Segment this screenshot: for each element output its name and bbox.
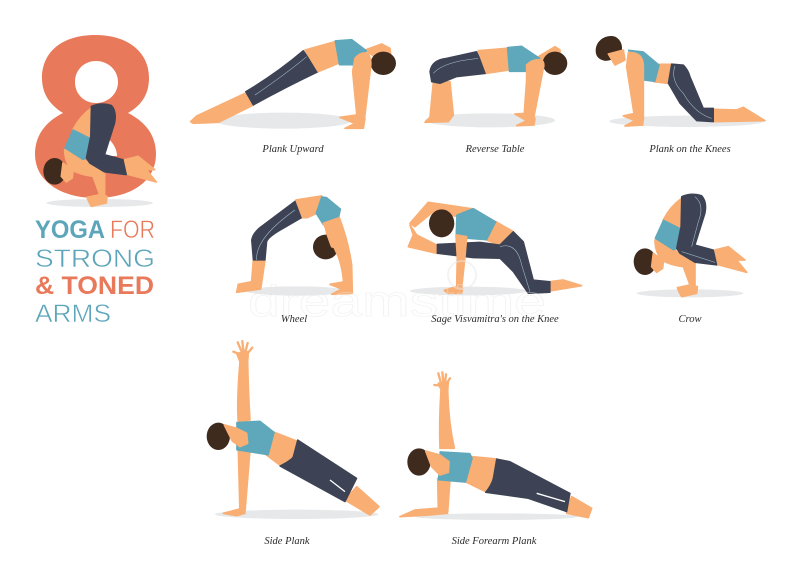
pose name: Sage Visvamitra's on the Knee [431, 314, 559, 325]
pose: sage visvamitra on the knee [408, 202, 582, 295]
pose name: Crow [679, 314, 701, 325]
hand [87, 195, 107, 206]
hair [313, 235, 338, 259]
big number 8 [35, 35, 156, 198]
pose name: Reverse Table [465, 144, 525, 155]
raised arm [410, 202, 473, 227]
shadow [609, 116, 764, 127]
trousers [252, 200, 303, 260]
pose name: Plank Upward [261, 144, 324, 155]
trousers [280, 440, 357, 502]
feet [715, 247, 747, 272]
pose: crow [634, 194, 747, 297]
trousers [430, 52, 487, 83]
hand [330, 282, 352, 294]
arm [65, 150, 105, 196]
hand [677, 285, 697, 297]
feet [125, 156, 156, 182]
support arm [456, 235, 467, 288]
raised arm [238, 362, 250, 422]
shoulder and neck [224, 425, 248, 447]
crow figure on number 8 [43, 104, 156, 207]
hair [634, 248, 656, 275]
waist [305, 42, 338, 72]
shin and foot [237, 260, 265, 292]
hair [371, 52, 396, 75]
pose: plank on the knees [596, 36, 765, 127]
pose name: Plank on the Knees [648, 144, 731, 155]
arm [655, 240, 695, 287]
trousers [86, 104, 126, 175]
watermark [248, 261, 546, 326]
shadow [637, 289, 743, 297]
arm [323, 218, 352, 293]
title: YOGA [35, 216, 105, 244]
hand [444, 287, 463, 293]
top [628, 50, 659, 82]
raised hand [237, 352, 248, 362]
hand [223, 509, 245, 516]
top [237, 421, 274, 455]
hands [623, 113, 643, 126]
top [335, 39, 367, 65]
hair [429, 209, 454, 237]
waist [487, 222, 513, 245]
trousers [246, 51, 318, 105]
hair [543, 52, 567, 75]
waist [467, 457, 497, 492]
waist [266, 432, 297, 466]
title: STRONG [35, 245, 155, 273]
shadow [247, 286, 347, 296]
legs [425, 82, 453, 122]
face [327, 232, 337, 248]
waist [478, 48, 508, 73]
pose: reverse table [425, 46, 567, 127]
pose name: Wheel [281, 314, 307, 325]
raised hand [438, 382, 448, 391]
pose name: Side Forearm Plank [452, 536, 537, 547]
face [61, 163, 73, 182]
forearm [400, 508, 448, 517]
title: ARMS [35, 300, 111, 328]
pose: side plank [207, 341, 379, 519]
shadow [410, 287, 527, 295]
shoulder and neck [426, 451, 449, 475]
leg [191, 93, 253, 123]
pose: wheel [237, 196, 352, 296]
top [438, 452, 472, 482]
pose: side forearm plank [400, 372, 592, 520]
foot held [408, 225, 437, 253]
hair [43, 158, 66, 185]
waist [296, 196, 322, 218]
raised arm [440, 390, 454, 448]
trousers [486, 459, 570, 512]
neck [325, 225, 335, 247]
back foot [550, 280, 582, 291]
feet [567, 497, 592, 518]
back [663, 198, 682, 228]
waist [654, 64, 672, 83]
back [73, 108, 91, 138]
hair [596, 36, 622, 61]
top [65, 130, 90, 160]
watermark: dreamstime [248, 277, 546, 326]
top [655, 220, 680, 250]
neck and face [538, 47, 560, 62]
arm [627, 53, 643, 120]
trousers [668, 64, 713, 122]
shadow [215, 113, 352, 129]
title [35, 216, 155, 328]
top [507, 46, 540, 72]
face [608, 50, 625, 65]
title: FOR [110, 216, 155, 244]
top [456, 208, 496, 240]
arm [524, 60, 544, 120]
lower leg and foot [713, 107, 765, 122]
shadow [46, 199, 153, 207]
trousers [437, 232, 550, 293]
title: & TONED [35, 272, 154, 300]
face [652, 253, 663, 272]
shadow [215, 510, 378, 519]
hair [407, 448, 431, 476]
neck and face [365, 44, 391, 58]
hands [340, 115, 365, 128]
support arm [238, 450, 250, 513]
shadow [415, 513, 578, 520]
upper arm [438, 478, 450, 512]
trousers [677, 194, 717, 265]
pose: plank upward [191, 39, 396, 129]
hair [207, 423, 230, 450]
pose name: Side Plank [264, 536, 310, 547]
lower leg [345, 487, 379, 515]
shadow [425, 113, 555, 127]
arm [353, 53, 371, 120]
hands [515, 113, 535, 126]
top [316, 197, 341, 225]
